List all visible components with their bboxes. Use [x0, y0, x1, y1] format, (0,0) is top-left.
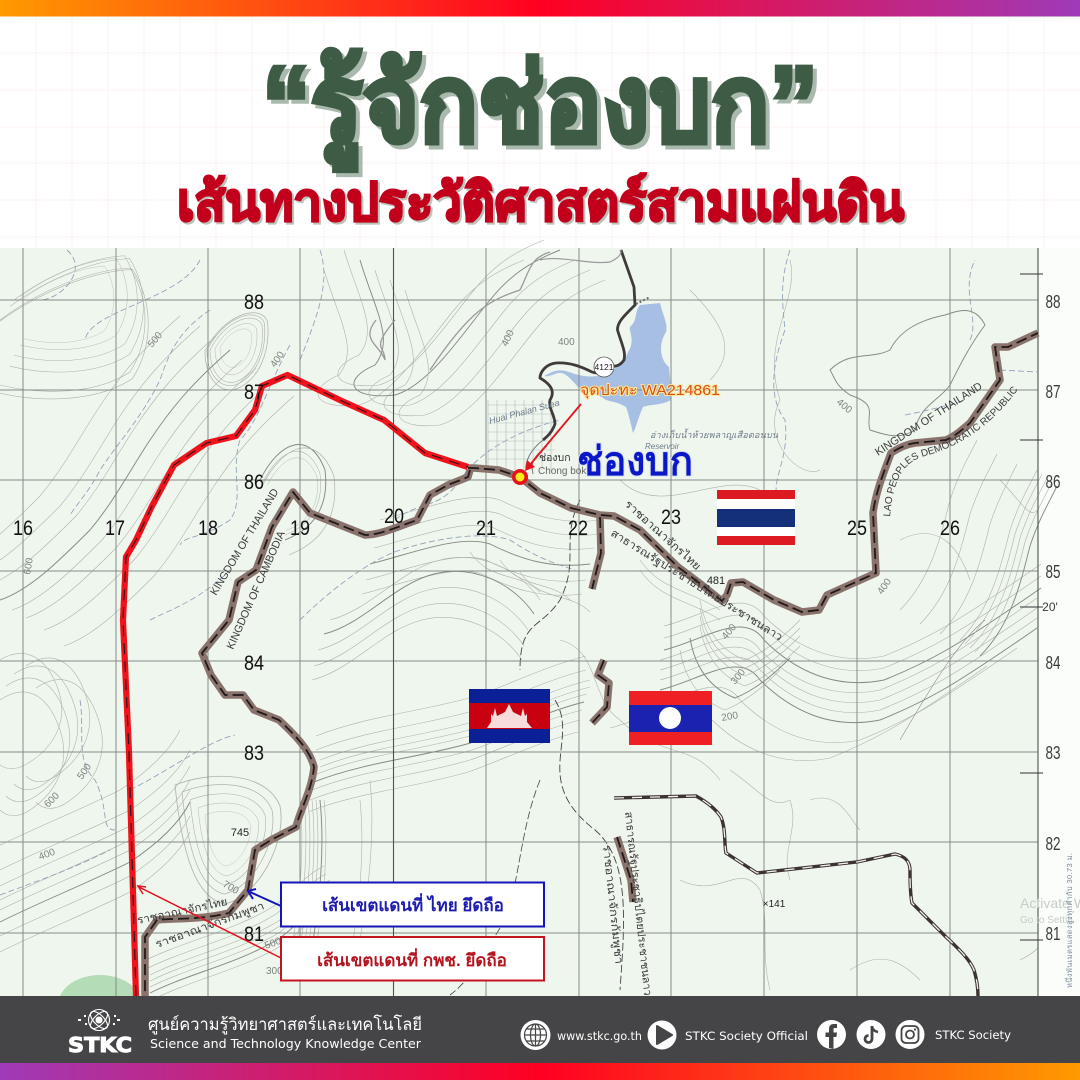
contour elevation labels: 400 [875, 576, 894, 597]
roads [370, 250, 650, 474]
grid numbers: right margin: 20' [1042, 600, 1058, 614]
grid numbers: right margin: 83 [1046, 743, 1060, 763]
flag: Thailand [717, 490, 795, 545]
icon: tiktok [856, 1020, 886, 1049]
country labels along border: สาธารณรัฐประชาธิปไตยประชาชนลาว [608, 527, 785, 644]
title: “รู้จักช่องบก” [262, 43, 818, 171]
YouTube text: STKC Society Official [685, 1029, 808, 1043]
watermark: activate windows: Go to Settin [1020, 915, 1073, 926]
place and stream names: Chong bok [538, 466, 587, 477]
grid numbers: eastings: 21 [476, 517, 496, 540]
grid numbers: right margin: 82 [1046, 834, 1060, 854]
grid numbers: eastings: 26 [940, 517, 960, 540]
grid numbers: northings: 83 [244, 742, 264, 765]
footer band [0, 996, 1080, 1063]
organisation name: ศูนย์ความรู้วิทยาศาสตร์และเทคโนโลยี [148, 1014, 422, 1035]
icon: instagram [896, 1020, 924, 1049]
border: Thai-held brown line [145, 333, 1038, 996]
grid numbers: right margin: 85 [1046, 562, 1060, 582]
country labels along border: ราชอาณาจักรไทย [622, 498, 704, 573]
clash point marker [512, 469, 528, 485]
contour elevation labels: 400 [834, 397, 854, 416]
border: dashed line south-east [614, 796, 978, 996]
grid numbers: right margin: 84 [1046, 653, 1060, 673]
grid numbers: eastings: 19 [290, 517, 310, 540]
country labels along border: KINGDOM OF CAMBODIA [225, 529, 288, 651]
flag: Laos [629, 691, 712, 745]
contour elevation labels: 200 [721, 710, 739, 724]
spot heights: 481 [707, 575, 725, 587]
contour elevation labels: 500 [146, 330, 165, 350]
country labels along border: ราชอาณาจักรกัมพูชา [600, 844, 624, 965]
icon: globe [520, 1020, 550, 1050]
grid numbers: eastings [13, 505, 960, 540]
country labels along border: KINGDOM OF THAILAND [208, 487, 281, 598]
callout: Thai-held boundary [281, 882, 544, 926]
watermark: activate windows [1020, 895, 1080, 926]
arrow: Thai line [248, 889, 281, 906]
STKC logo [68, 1009, 132, 1057]
grid numbers: northings: 81 [244, 923, 264, 946]
spot heights: 745 [231, 827, 249, 839]
grid lines [0, 248, 1038, 996]
grid numbers: eastings: 22 [568, 517, 588, 540]
contour elevation labels: 500 [75, 761, 94, 782]
bottom gradient bar [0, 1063, 1080, 1080]
town grid [488, 400, 555, 470]
grid numbers: northings: 87 [244, 381, 264, 404]
contour elevation labels: 600 [42, 790, 62, 810]
contour elevation labels: 400 [37, 847, 57, 863]
grid numbers: northings: 84 [244, 652, 264, 675]
grid numbers: eastings: 25 [847, 517, 867, 540]
grid numbers: northings: 88 [244, 291, 264, 314]
grid numbers: eastings: 16 [13, 517, 33, 540]
subtitle: เส้นทางประวัติศาสตร์สามแผ่นดิน [177, 173, 904, 232]
callout: Thai-held boundary: เส้นเขตแดนที่ ไทย ยึดถือ [322, 893, 504, 915]
grid numbers: right margin: 88 [1046, 292, 1060, 312]
place and stream names: Huai Phalan Suea [488, 397, 561, 426]
streams [0, 250, 1037, 995]
grid numbers: eastings: 17 [105, 517, 125, 540]
panel: topographic map [0, 240, 1080, 996]
organisation name: Science and Technology Knowledge Center [150, 1037, 421, 1051]
arrow: RTSD line [138, 886, 281, 958]
title: “รู้จักช่องบก” [266, 47, 822, 175]
green vegetation patch [58, 975, 142, 1035]
header background [0, 16, 1080, 248]
contour elevation labels [22, 328, 894, 977]
clash point label: จุดปะทะ WA214861 [580, 383, 720, 399]
roads: 4121 [595, 362, 614, 372]
icon: facebook [817, 1020, 846, 1049]
contour elevation labels: 400 [500, 328, 517, 348]
border: RTSD red line [123, 375, 468, 996]
top gradient bar [0, 0, 1080, 16]
spot heights [231, 575, 786, 910]
contour lines [0, 240, 1057, 999]
STKC logo: STKC [68, 1033, 132, 1057]
place and stream names [488, 397, 779, 477]
place and stream names: อ่างเก็บน้ำห้วยพลาญเสือตอนบน [650, 428, 779, 441]
spot heights: ×141 [763, 899, 786, 910]
reservoir [544, 303, 671, 433]
grid numbers: northings [244, 291, 264, 946]
contour elevation labels: 400 [720, 622, 739, 642]
subtitle: เส้นทางประวัติศาสตร์สามแผ่นดิน [179, 175, 906, 234]
contour elevation labels: 300 [266, 966, 283, 977]
margin note: หนึ่งพันเมตรแสดงสูงทุกคำกับ 30.73 ม. [1064, 853, 1074, 988]
icon: play [648, 1020, 676, 1050]
contour elevation labels: 500 [263, 936, 283, 952]
place and stream names: ช่องบก [539, 452, 571, 464]
clash point label: จุดปะทะ WA214861 [580, 383, 720, 399]
contour elevation labels: 700 [220, 879, 241, 897]
Chong Bok label: ช่องบก [577, 440, 693, 484]
grid numbers: eastings: 20 [384, 505, 404, 528]
arrow: clash point pointer [525, 404, 581, 471]
country labels along border: สาธารณรัฐประชาธิปไตยประชาชนลาว [622, 811, 654, 996]
contour elevation labels: 400 [558, 337, 575, 348]
contour elevation labels: 300 [729, 667, 748, 687]
callout: RTSD-held boundary [281, 937, 544, 980]
Instagram text: STKC Society [935, 1028, 1011, 1042]
country labels along border: KINGDOM OF THAILAND [873, 380, 985, 459]
flag: Cambodia [469, 689, 550, 743]
country labels along border: LAO PEOPLES DEMOCRATIC REPUBLIC [883, 386, 1017, 516]
grid numbers: northings: 86 [244, 471, 264, 494]
grid numbers: right margin [1042, 292, 1060, 944]
grid numbers: right margin: 86 [1046, 472, 1060, 492]
logo atom mark [78, 1009, 120, 1031]
grid numbers: right margin: 87 [1046, 382, 1060, 402]
country labels along border: ราชอาณาจักรกัมพูชา [154, 900, 266, 951]
country labels along border: ราชอาณาจักรไทย [136, 895, 229, 927]
website text: www.stkc.go.th [557, 1029, 642, 1043]
grid numbers: eastings: 18 [198, 517, 218, 540]
contour elevation labels: 400 [268, 349, 287, 370]
place and stream names: Reservoir [645, 442, 680, 451]
country labels along border [108, 380, 1017, 1026]
grid numbers: right margin: 81 [1046, 924, 1060, 944]
contour elevation labels: 600 [22, 557, 36, 576]
Chong Bok label: ช่องบก [577, 440, 693, 484]
organisation name [148, 1014, 422, 1051]
grid numbers: eastings: 23 [661, 506, 681, 529]
callout: RTSD-held boundary: เส้นเขตแดนที่ กพช. ยึดถือ [317, 948, 507, 970]
